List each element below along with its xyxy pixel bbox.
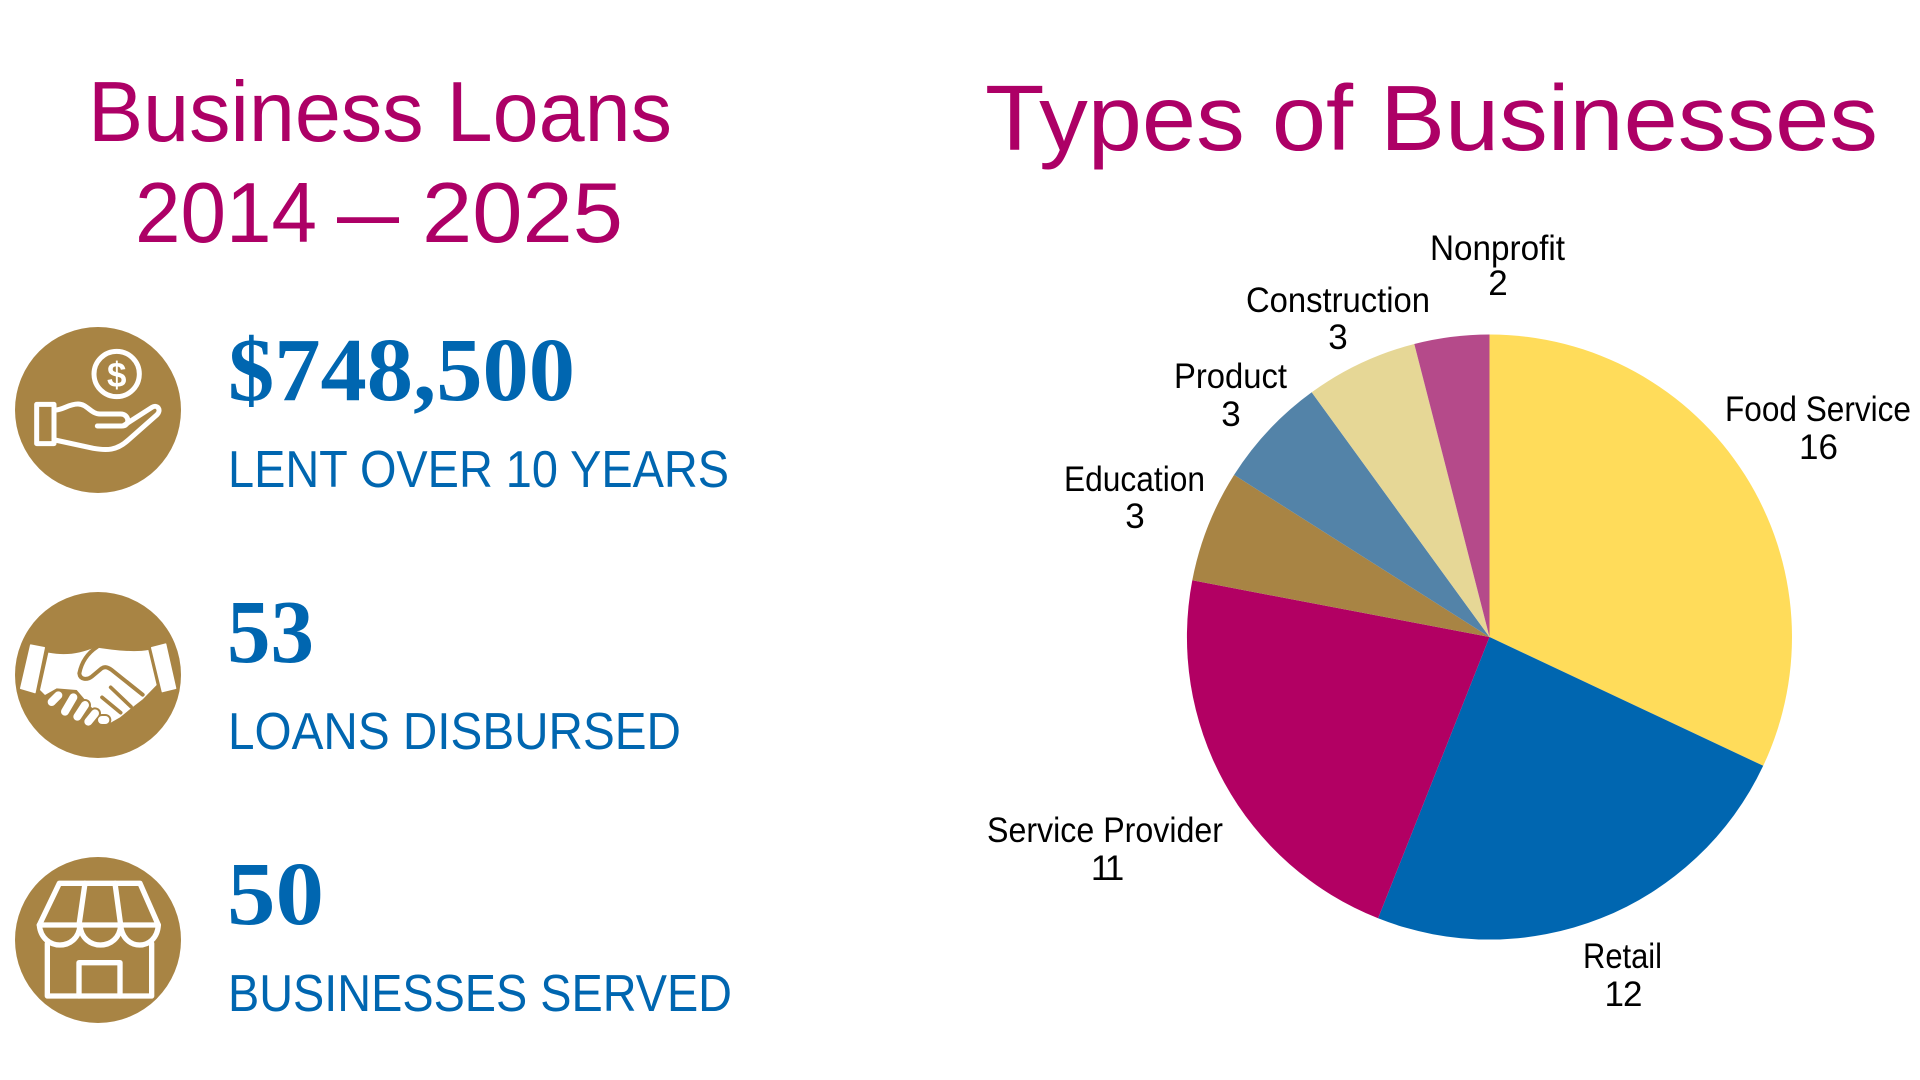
label: product	[1174, 357, 1287, 434]
slice: retail 12	[1378, 637, 1763, 940]
label: construction: Construction	[1246, 281, 1430, 320]
label: service provider	[987, 811, 1223, 888]
slice: education 3	[1192, 475, 1490, 637]
label: service provider: Service Provider	[987, 811, 1223, 850]
title: Business Loans 2014 — 2025	[88, 65, 672, 261]
icon: handshake	[15, 592, 181, 758]
label: nonprofit: Nonprofit	[1430, 229, 1565, 268]
label: retail: 12	[1605, 975, 1641, 1014]
title: Business Loans 2014 — 2025: Business Loans	[88, 65, 672, 160]
icon: hand holding coin: $	[107, 356, 126, 395]
label: education: 3	[1125, 497, 1145, 536]
figure: 53: 53	[227, 583, 314, 682]
icon: storefront	[15, 857, 181, 1023]
caption: lent over 10 years: LENT OVER 10 YEARS	[228, 441, 729, 499]
figure: 50: 50	[227, 845, 324, 944]
slice: nonprofit 2	[1414, 334, 1490, 637]
label: education: Education	[1064, 460, 1205, 499]
label: service provider: 11	[1091, 849, 1123, 888]
label: food service	[1725, 390, 1911, 467]
caption: loans disbursed: LOANS DISBURSED	[228, 703, 681, 761]
label: construction: 3	[1328, 318, 1348, 357]
title: Business Loans 2014 — 2025: 2014	[135, 166, 317, 261]
label: education	[1064, 460, 1205, 536]
slice: construction 3	[1312, 344, 1490, 637]
slice: food service 16	[1490, 334, 1792, 766]
stat: amount lent	[15, 321, 729, 499]
title: Business Loans 2014 — 2025: 2025	[422, 166, 623, 261]
stat: businesses served	[15, 845, 732, 1023]
title: Business Loans 2014 — 2025: —	[337, 166, 399, 261]
label: retail: Retail	[1583, 937, 1662, 976]
label: nonprofit: 2	[1488, 264, 1508, 303]
label: retail	[1583, 937, 1662, 1014]
icon: hand holding coin	[15, 327, 181, 493]
caption: businesses served: BUSINESSES SERVED	[228, 965, 732, 1023]
figure: $748,500: $748,500	[228, 321, 575, 420]
label: construction	[1246, 281, 1430, 357]
slice: service provider 11	[1187, 580, 1490, 918]
stat: loans disbursed	[15, 583, 681, 761]
label: product: 3	[1221, 395, 1241, 434]
label: nonprofit	[1430, 229, 1565, 303]
label: food service: 16	[1799, 428, 1838, 467]
slice: product 3	[1234, 392, 1490, 637]
label: product: Product	[1174, 357, 1287, 396]
pie chart: types of businesses	[1187, 334, 1792, 940]
title: Types of Businesses: Types of Businesses	[985, 66, 1878, 170]
